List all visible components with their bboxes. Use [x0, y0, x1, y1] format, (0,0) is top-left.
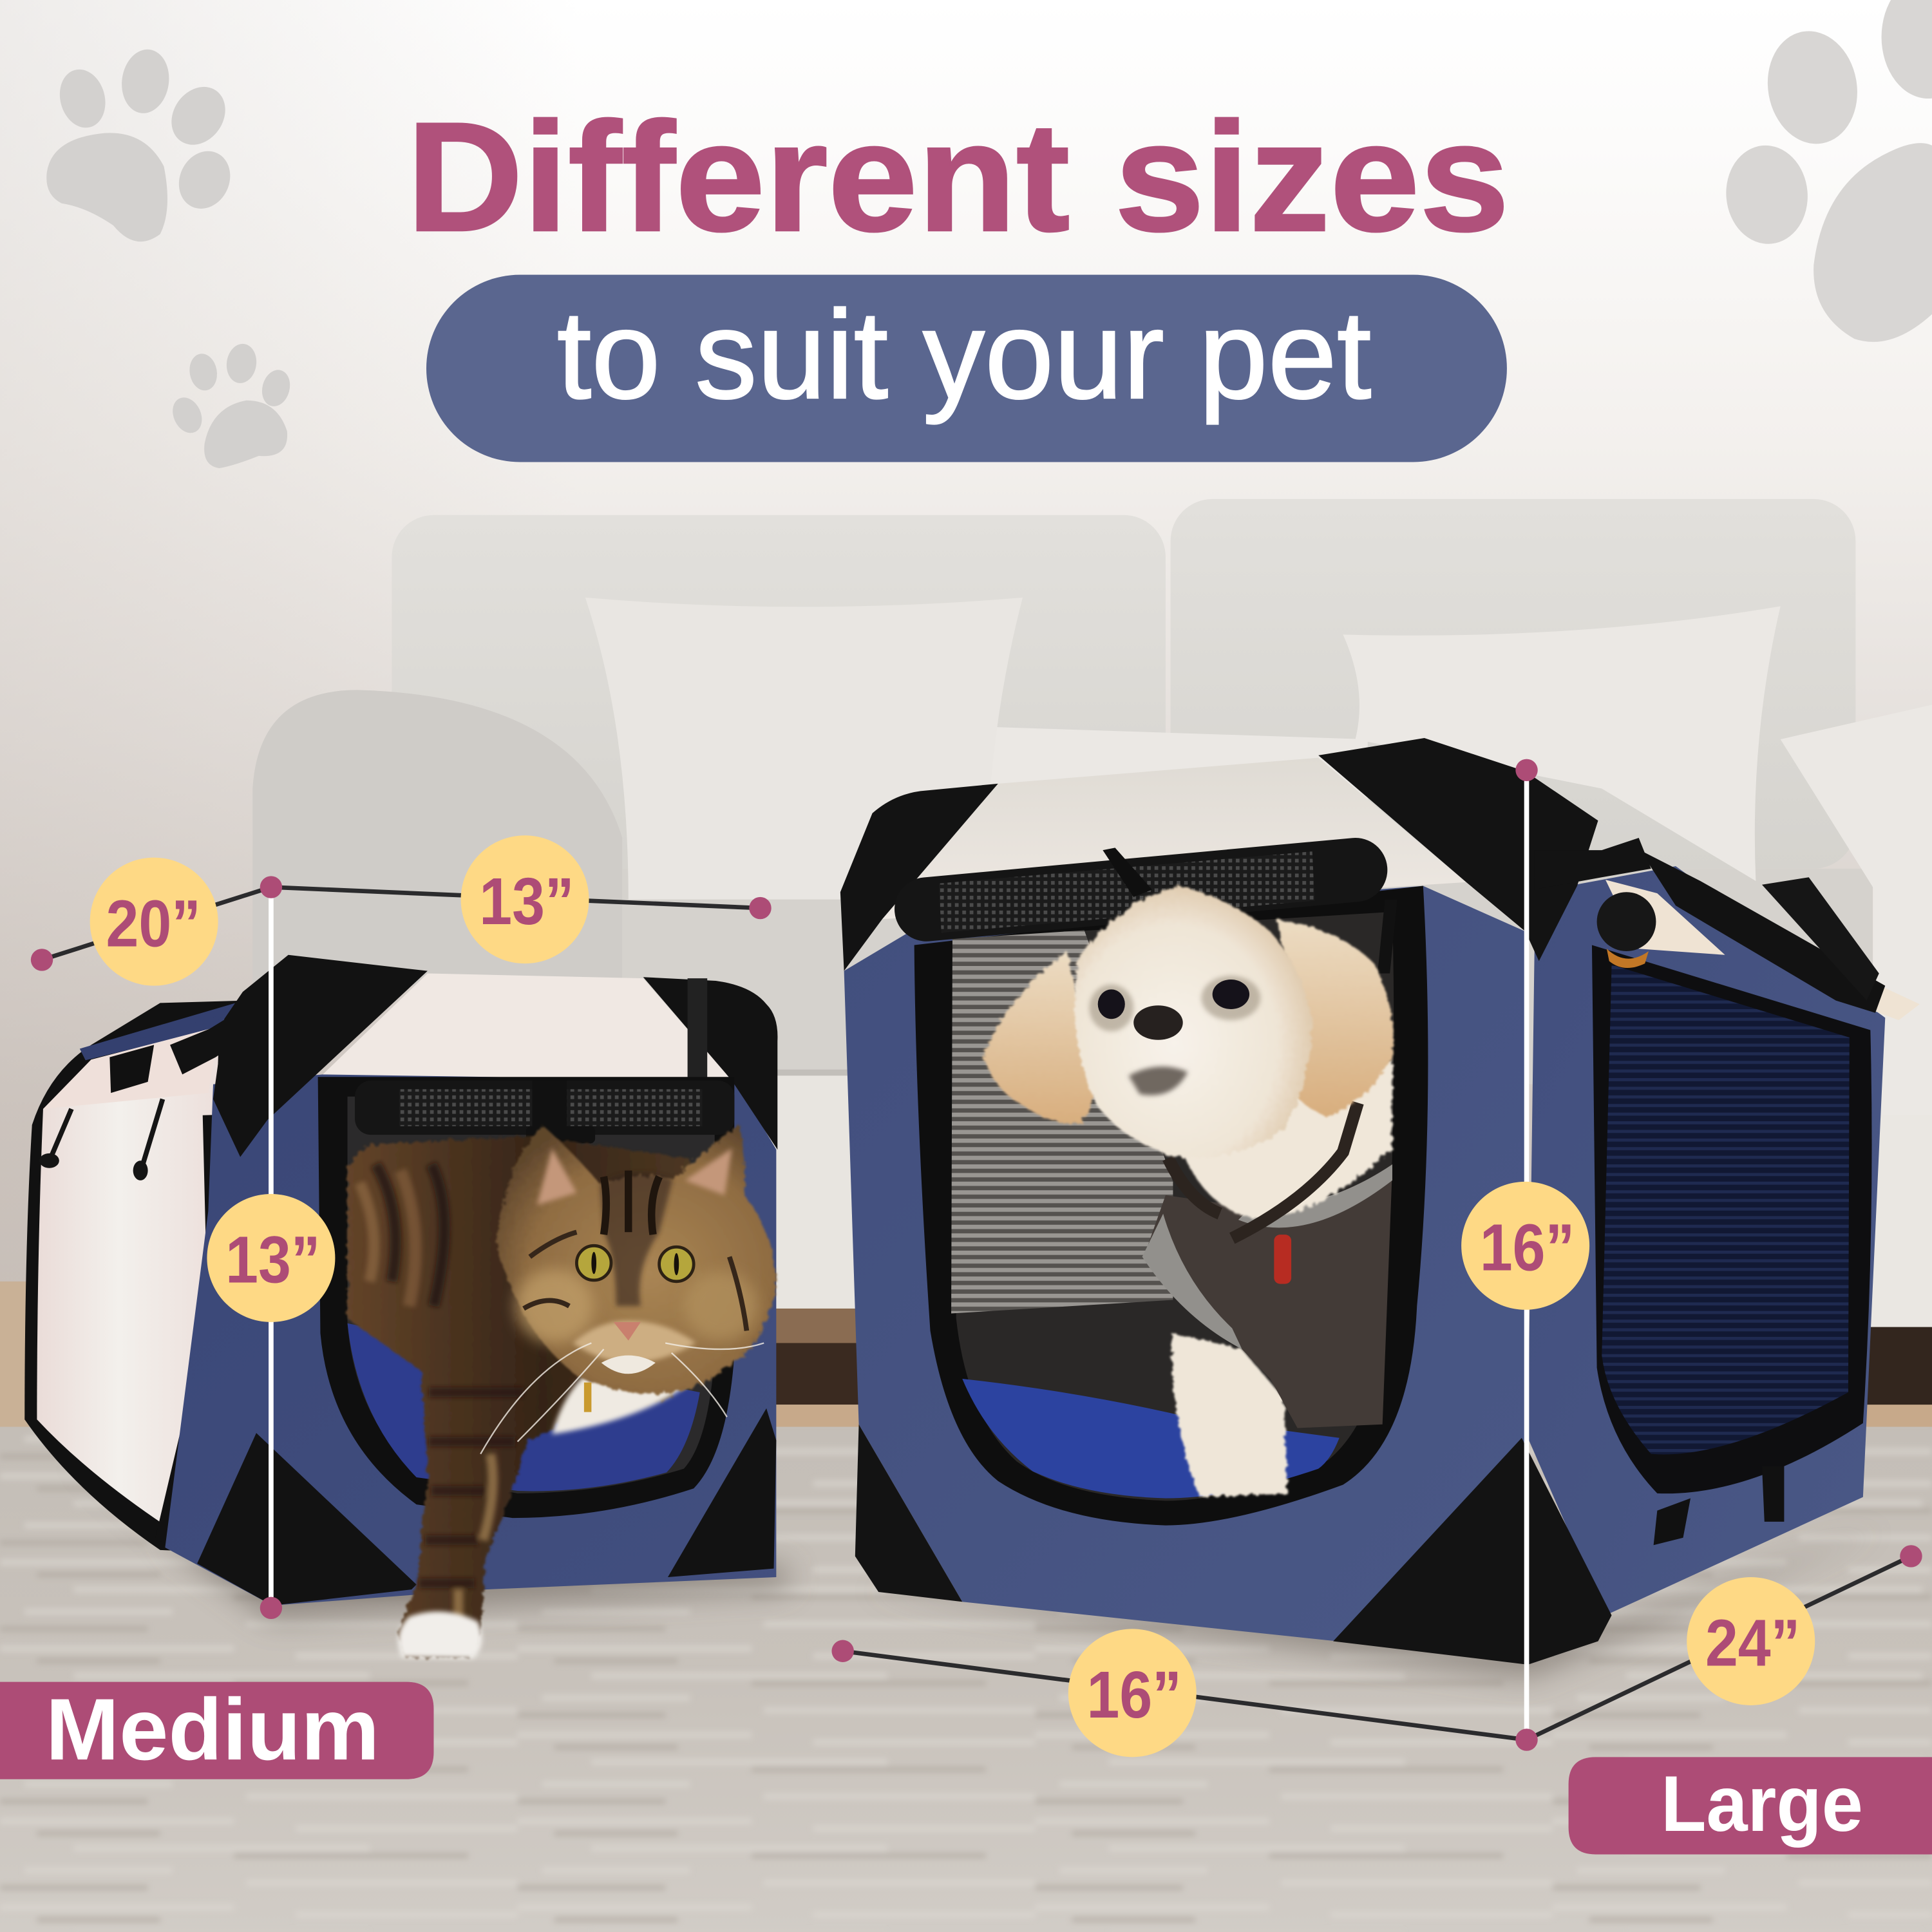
badge: medium height 13 inches: 13”	[225, 1222, 320, 1297]
dog mouth	[1129, 1066, 1188, 1095]
dog	[983, 886, 1394, 1497]
cat nose	[614, 1322, 641, 1341]
cat white paw	[398, 1611, 482, 1658]
dog eyes	[1098, 980, 1249, 1019]
badge: large length 24 inches: 24”	[1705, 1605, 1800, 1680]
dog head	[1074, 886, 1312, 1157]
cat collar tag	[584, 1383, 591, 1412]
cat	[348, 1125, 776, 1658]
subtitle pill	[426, 275, 1507, 462]
measure: large crate lines	[831, 759, 1922, 1751]
cat fur markings	[360, 1164, 524, 1627]
badge: medium width 13 inches	[461, 835, 589, 963]
large crate folded cream flap	[1597, 850, 1920, 1020]
dog nose	[1133, 1005, 1183, 1040]
paw print: small left	[167, 342, 294, 468]
badge: large height 16 inches	[1461, 1182, 1589, 1310]
cat white chest	[552, 1356, 697, 1434]
dog chest fur	[1171, 1059, 1392, 1220]
badge: large height 16 inches: 16”	[1480, 1210, 1575, 1285]
large crate cream top	[882, 758, 1466, 919]
label: Medium: Medium	[46, 1680, 379, 1778]
badge: medium height 13 inches	[207, 1194, 335, 1322]
crate shadows	[37, 1448, 1885, 1678]
label: Large: Large	[1661, 1759, 1863, 1848]
dog right ear	[1276, 919, 1394, 1116]
medium crate	[24, 955, 777, 1605]
dog red tag	[1274, 1235, 1291, 1284]
measure: medium crate lines	[31, 876, 772, 1619]
label: Large	[1569, 1757, 1932, 1854]
dog eye patches	[1089, 976, 1260, 1031]
medium crate cream top	[323, 973, 732, 1081]
dog white leg	[1171, 1333, 1287, 1497]
badge: medium width 13 inches: 13”	[479, 864, 574, 938]
sofa	[252, 499, 1932, 1327]
large crate black corners	[840, 738, 1651, 1665]
dog sweater grey trim	[1142, 1164, 1392, 1349]
badge: large length 24 inches	[1687, 1577, 1815, 1705]
paw print: top right	[1722, 0, 1932, 342]
cat whiskers	[480, 1343, 764, 1454]
large crate	[840, 738, 1920, 1665]
badge: large width 16 inches	[1068, 1629, 1197, 1757]
medium crate black corners	[197, 955, 777, 1605]
badge: medium length 20 inches: 20”	[106, 886, 201, 960]
room background wall	[0, 0, 1932, 1479]
cat body and leg	[348, 1136, 703, 1657]
cat head	[497, 1125, 776, 1394]
badge: medium length 20 inches	[90, 858, 218, 986]
cat eyes	[576, 1245, 694, 1282]
large crate front panel	[844, 886, 1528, 1641]
rug floor	[0, 1427, 1932, 1932]
wooden baseboard and shadow under sofa	[0, 1282, 1932, 1434]
medium crate window	[318, 1077, 734, 1518]
medium crate front panel	[165, 1074, 776, 1605]
dog collar	[1168, 1103, 1358, 1238]
badge: large width 16 inches: 16”	[1086, 1657, 1182, 1732]
large crate front window	[914, 886, 1428, 1526]
dog fleece sweater	[1144, 1168, 1392, 1428]
large crate rolled mesh door	[927, 848, 1397, 973]
medium crate rolled mesh door	[355, 1081, 734, 1144]
large crate side mesh window	[1592, 945, 1872, 1545]
sofa pillows	[585, 598, 1781, 900]
paw print: top left	[46, 46, 240, 242]
subtitle pill: to suit your pet	[557, 285, 1371, 425]
medium crate side panel	[24, 996, 276, 1553]
title: Different sizes	[406, 91, 1510, 264]
large crate side panel	[1528, 866, 1885, 1615]
dog left ear	[983, 951, 1095, 1123]
